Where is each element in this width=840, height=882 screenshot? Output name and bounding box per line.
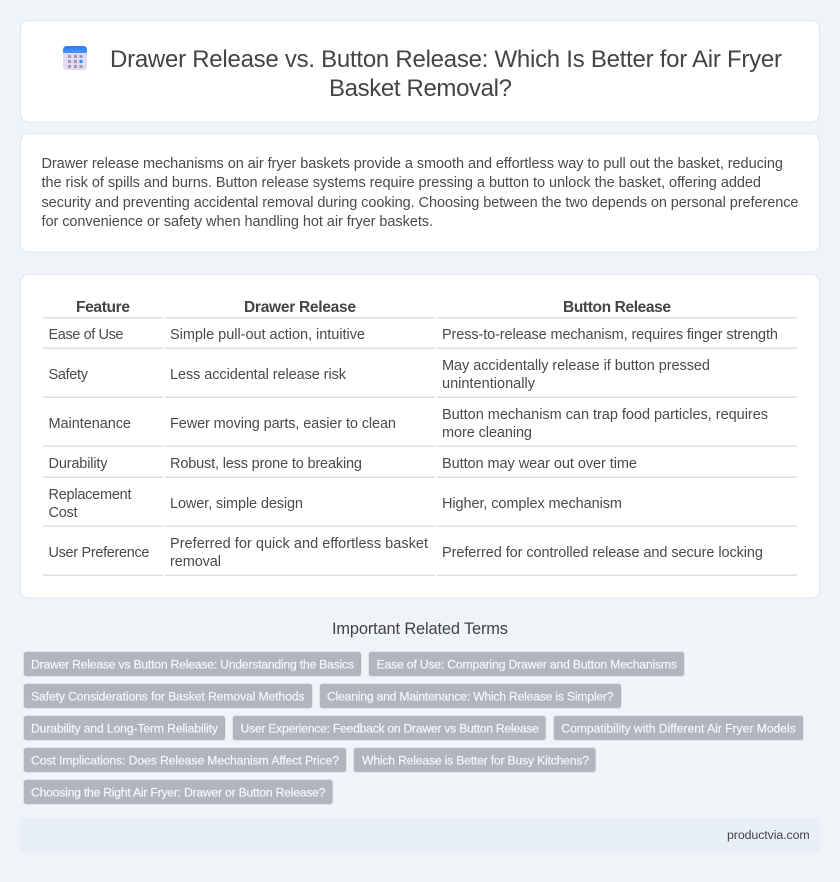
intro text: for convenience or safety when handling hot air fryer baskets. <box>42 214 433 230</box>
footer: productvia.com <box>727 828 810 842</box>
row: maintenance: more cleaning <box>442 425 532 441</box>
row: safety: unintentionally <box>442 376 536 392</box>
row: safety: Less accidental release risk <box>170 367 347 383</box>
related terms heading: Important Related Terms <box>332 620 508 638</box>
related terms tags: Drawer Release vs Button Release: Understanding the Basics <box>31 658 354 672</box>
row: replacement cost: Higher, complex mechanism <box>442 496 622 512</box>
row: safety: Safety <box>48 367 89 383</box>
row: replacement cost: Cost <box>48 505 78 521</box>
row: durability <box>48 456 637 472</box>
related terms tags: User Experience: Feedback on Drawer vs Button Release <box>240 722 539 736</box>
related terms tags: Cost Implications: Does Release Mechanism Affect Price? <box>31 754 339 768</box>
header panel <box>20 20 820 122</box>
intro text: security and preventing accidental removal during cooking. Choosing between the two depends on personal preference <box>42 195 798 211</box>
table header: Drawer Release <box>244 299 356 316</box>
row: ease of use: Press-to-release mechanism, requires finger strength <box>442 327 778 343</box>
row: ease of use: Simple pull-out action, intuitive <box>170 327 365 343</box>
related terms tags: Durability and Long-Term Reliability <box>31 722 219 736</box>
row: ease of use <box>48 327 778 343</box>
row: durability: Button may wear out over time <box>442 456 637 472</box>
row: user preference <box>48 536 763 570</box>
row: user preference: Preferred for controlled release and secure locking <box>442 545 763 561</box>
related terms tags: Choosing the Right Air Fryer: Drawer or Button Release? <box>31 786 326 800</box>
row: durability: Robust, less prone to breaking <box>170 456 362 472</box>
row: maintenance <box>48 407 768 441</box>
row: maintenance: Button mechanism can trap food particles, requires <box>442 407 768 423</box>
row: replacement cost <box>48 487 622 521</box>
title: Drawer Release vs. Button Release: Which Is Better for Air Fryer <box>110 46 782 73</box>
related terms tags: Safety Considerations for Basket Removal Methods <box>31 690 304 704</box>
intro text: the risk of spills and burns. Button release systems require pressing a button to unlock the basket, offering added <box>42 175 761 191</box>
row: user preference: User Preference <box>48 545 150 561</box>
row: durability: Durability <box>48 456 108 472</box>
table header: Feature <box>76 299 130 316</box>
table header <box>76 299 671 316</box>
row: maintenance: Fewer moving parts, easier to clean <box>170 416 396 432</box>
row: safety <box>48 358 710 392</box>
row: ease of use: Ease of Use <box>48 327 124 343</box>
related terms tags: Which Release is Better for Busy Kitchens? <box>362 754 589 768</box>
row: replacement cost: Replacement <box>48 487 132 503</box>
intro text: Drawer release mechanisms on air fryer baskets provide a smooth and effortless way to pull out the basket, reducing <box>42 156 783 172</box>
comparison table panel <box>20 274 820 598</box>
related terms tags: Cleaning and Maintenance: Which Release is Simpler? <box>327 690 614 704</box>
related terms tags <box>24 652 804 804</box>
row: replacement cost: Lower, simple design <box>170 496 303 512</box>
icon: calendar <box>63 46 87 70</box>
row: maintenance: Maintenance <box>48 416 131 432</box>
intro text <box>42 156 798 230</box>
row: user preference: Preferred for quick and effortless basket <box>170 536 428 552</box>
table header: Button Release <box>563 299 671 316</box>
title <box>110 46 782 102</box>
row: safety: May accidentally release if button pressed <box>442 358 710 374</box>
title: Basket Removal? <box>329 75 512 102</box>
footer <box>20 818 820 852</box>
related terms tags: Ease of Use: Comparing Drawer and Button Mechanisms <box>376 658 677 672</box>
related terms tags: Compatibility with Different Air Fryer Models <box>561 722 796 736</box>
row: user preference: removal <box>170 554 221 570</box>
intro panel <box>20 134 820 252</box>
